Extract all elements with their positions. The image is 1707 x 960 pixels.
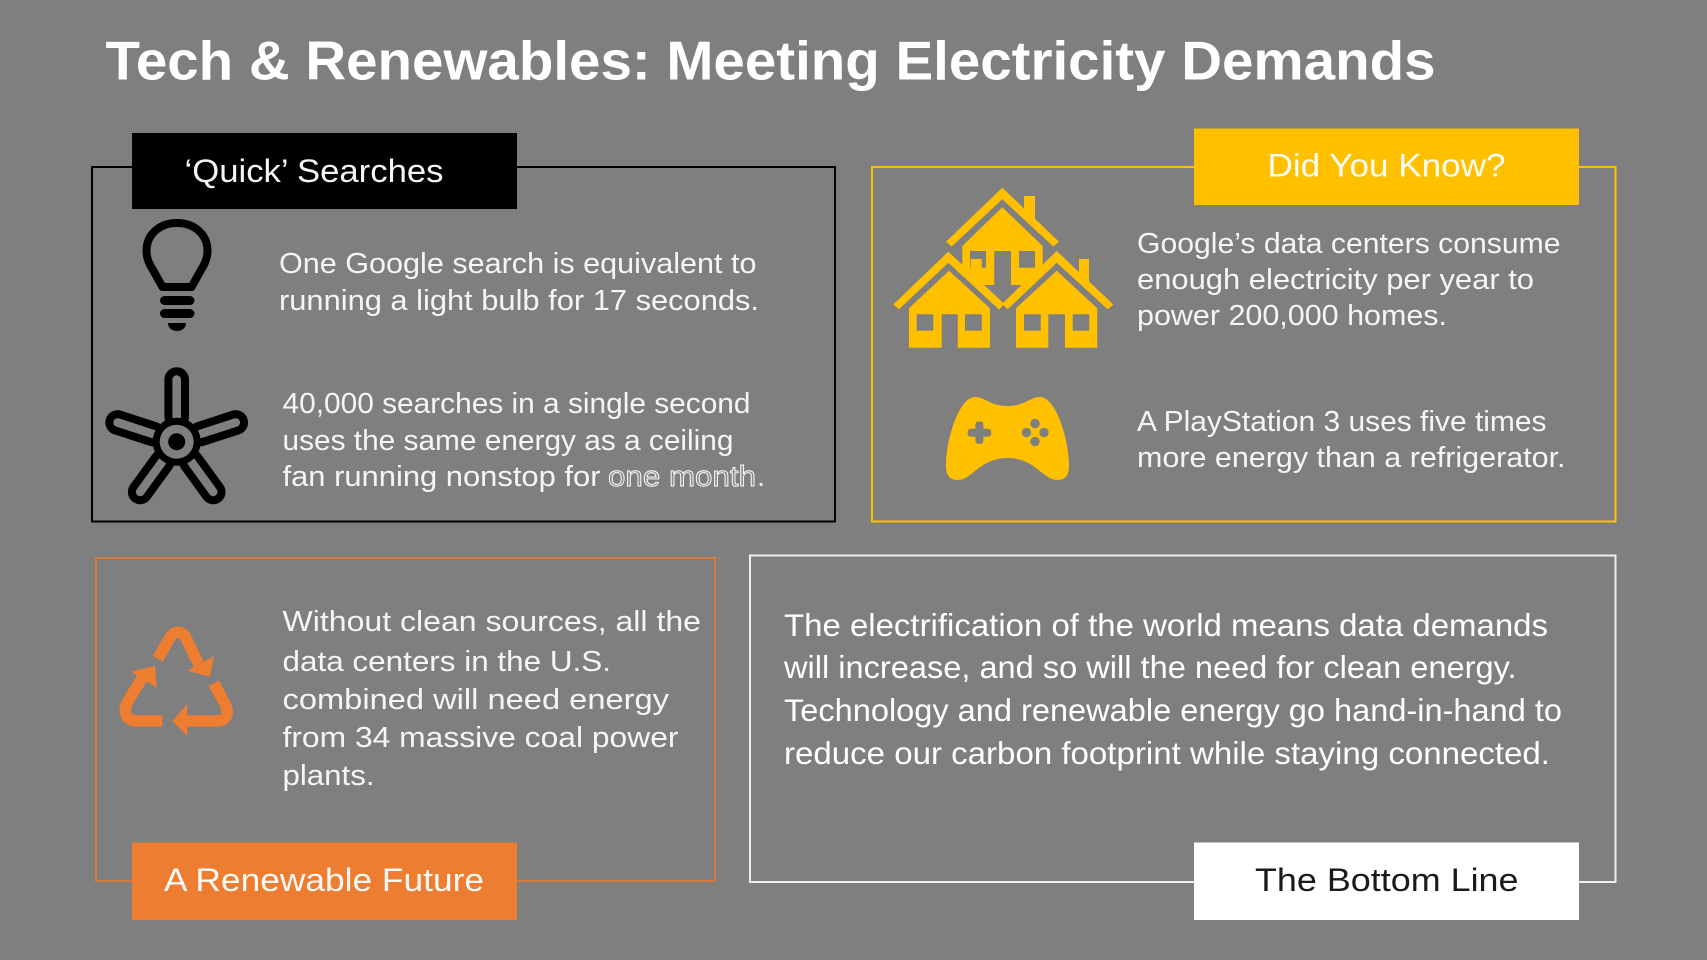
text: data centers fact	[1137, 228, 1560, 332]
text: data centers fact: power 200,000 homes.	[1137, 300, 1447, 332]
title: Tech & Renewables: Meeting Electricity Demands	[106, 30, 1436, 92]
panel border: quick searches	[92, 167, 835, 522]
heading tab: A Renewable Future: A Renewable Future	[164, 862, 484, 898]
text: PlayStation fact: more energy than a refrigerator.	[1137, 442, 1566, 474]
text: data centers fact: enough electricity per year to	[1137, 264, 1534, 296]
heading tab: The Bottom Line	[1194, 842, 1579, 920]
text: data centers fact: Google’s data centers consume	[1137, 228, 1560, 260]
text: coal plants fact	[282, 606, 701, 792]
text: light bulb fact: One Google search is equivalent to	[279, 248, 756, 280]
heading tab: 'Quick' Searches	[132, 133, 517, 209]
text: coal plants fact: combined will need energy	[282, 684, 670, 716]
text: coal plants fact: plants.	[282, 760, 374, 792]
panel: did you know	[872, 128, 1616, 522]
heading tab: Did You Know?: Did You Know?	[1268, 148, 1506, 184]
heading tab: Did You Know?	[1194, 128, 1579, 205]
icon: three houses	[893, 188, 1113, 348]
text: ceiling fan fact: one month	[608, 461, 756, 493]
text: bottom line summary: Technology and renewable energy go hand-in-hand to	[784, 692, 1562, 728]
heading tab: A Renewable Future	[132, 842, 517, 920]
icon: game controller	[946, 397, 1069, 480]
text: ceiling fan fact: .	[757, 461, 765, 493]
text: coal plants fact: from 34 massive coal power	[282, 722, 679, 754]
panel: the bottom line	[750, 556, 1616, 920]
text: bottom line summary: will increase, and so will the need for clean energy.	[783, 649, 1516, 685]
heading tab: The Bottom Line: The Bottom Line	[1255, 862, 1518, 898]
text: coal plants fact: Without clean sources, all the	[282, 606, 701, 638]
text: PlayStation fact	[1137, 406, 1566, 474]
heading tab: 'Quick' Searches: ‘Quick’ Searches	[184, 153, 444, 189]
text: bottom line summary: reduce our carbon footprint while staying connected.	[784, 735, 1550, 771]
panel border: a renewable future	[96, 558, 715, 881]
icon: recycling arrows	[125, 632, 227, 736]
text: ceiling fan fact	[282, 388, 765, 493]
icon: light bulb	[146, 223, 208, 331]
text: PlayStation fact: A PlayStation 3 uses five times	[1137, 406, 1546, 438]
text: light bulb fact	[279, 248, 759, 317]
text: ceiling fan fact: 40,000 searches in a single second	[282, 388, 750, 420]
text: coal plants fact: data centers in the U.S.	[282, 646, 611, 678]
panel border: the bottom line	[750, 556, 1616, 882]
panel border: did you know	[872, 167, 1616, 522]
text: bottom line summary	[783, 607, 1562, 771]
text: ceiling fan fact: fan running nonstop for	[282, 461, 601, 493]
text: light bulb fact: running a light bulb for 17 seconds.	[279, 285, 759, 317]
text: ceiling fan fact: uses the same energy as a ceiling	[282, 425, 734, 457]
panel: quick searches	[92, 133, 835, 522]
icon: ceiling fan	[107, 371, 246, 504]
panel: a renewable future	[96, 558, 715, 920]
text: bottom line summary: The electrification of the world means data demands	[784, 607, 1548, 643]
